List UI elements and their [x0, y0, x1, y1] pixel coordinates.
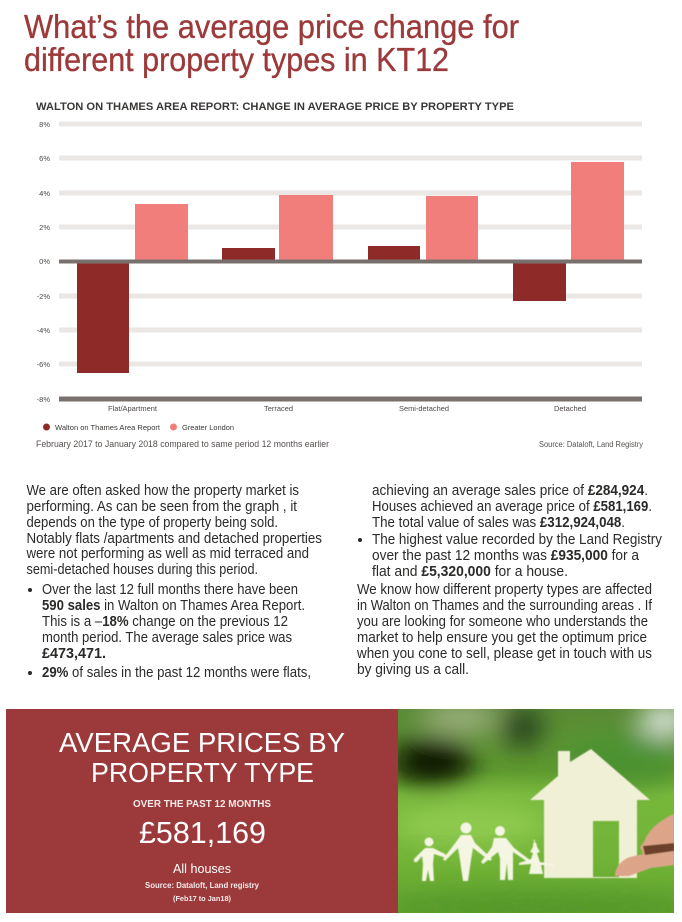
text block: right column: when you cone to sell, please get in touch with us [356, 646, 652, 662]
panel: bar chart [36, 101, 643, 449]
chart title: WALTON ON THAMES AREA REPORT: CHANGE IN AVERAGE PRICE BY PROPERTY TYPE [36, 101, 514, 113]
y axis labels: 0% [39, 257, 50, 266]
text block: left column: This is a –18% change on the previous 12 [42, 614, 288, 630]
text block: right column: The highest value recorded by the Land Registry [372, 532, 663, 548]
text block: right column [356, 483, 663, 678]
text block: left column: performing. As can be seen from the graph , it [26, 499, 297, 515]
y axis labels: -2% [37, 292, 50, 301]
text block: left column: month period. The average sales price was [42, 630, 292, 646]
text block: right column: in Walton on Thames and the surrounding areas . If [357, 598, 653, 614]
text block: left column: Over the last 12 full months there have been [42, 582, 298, 598]
text block: right column: market to help ensure you get the optimum price [357, 630, 647, 646]
text block: right column: We know how different property types are affected [357, 582, 652, 598]
y axis labels: 2% [39, 223, 50, 232]
x axis labels: Detached [554, 404, 586, 413]
period note: February 2017 to January 2018 compared to same period 12 months earlier [36, 439, 329, 449]
panel heading: PROPERTY TYPE [91, 757, 314, 788]
legend [43, 423, 234, 432]
text block: left column: 29% of sales in the past 12 months were flats, [42, 665, 311, 681]
icon: paper house [530, 749, 650, 878]
panel source [145, 881, 260, 903]
text block: left column: We are often asked how the property market is [26, 483, 299, 499]
panel: average prices [6, 709, 398, 913]
bars: Greater London [135, 162, 624, 262]
text block: right column: The total value of sales was £312,924,048. [372, 515, 625, 531]
legend: Greater London [182, 423, 234, 432]
y axis labels [37, 120, 50, 404]
title [24, 8, 519, 78]
text block: left column: Notably flats /apartments and detached properties [26, 531, 322, 547]
y axis labels: -6% [37, 360, 50, 369]
price figure: £581,169 [139, 815, 266, 850]
text block: right column: Houses achieved an average price of £581,169. [372, 499, 652, 515]
icon: paper family [414, 822, 554, 881]
y axis labels: -4% [37, 326, 50, 335]
x axis labels [108, 404, 586, 413]
text block: right column: achieving an average sales price of £284,924. [372, 483, 648, 499]
panel heading [59, 727, 345, 788]
y axis labels: 4% [39, 189, 50, 198]
bars: Walton on Thames [77, 246, 566, 373]
text block: left column [26, 483, 322, 681]
price label: All houses [173, 862, 231, 876]
text block: right column: by giving us a call. [357, 662, 469, 678]
x axis labels: Terraced [264, 404, 293, 413]
x axis labels: Semi-detached [399, 404, 449, 413]
text block: right column: over the past 12 months was £935,000 for a [372, 548, 640, 564]
y axis labels: 8% [39, 120, 50, 129]
text block: left column: semi-detached houses during this period. [26, 562, 258, 578]
title: What’s the average price change for [24, 8, 519, 45]
source note: Source: Dataloft, Land Registry [539, 440, 643, 449]
subheading: OVER THE PAST 12 MONTHS [133, 799, 271, 810]
x axis labels: Flat/Apartment [108, 404, 158, 413]
text block: left column: depends on the type of property being sold. [26, 515, 278, 531]
panel heading: AVERAGE PRICES BY [59, 727, 345, 758]
text block: left column: were not performing as well as mid terraced and [26, 546, 309, 562]
legend: Walton on Thames Area Report [55, 423, 161, 432]
text block: right column: flat and £5,320,000 for a house. [372, 564, 568, 580]
panel source: Source: Dataloft, Land registry [145, 881, 260, 890]
icon: hand [615, 814, 674, 876]
photo: paper house and family on grass [398, 709, 674, 913]
text block: left column: £473,471. [42, 646, 106, 662]
title: different property types in KT12 [24, 41, 449, 78]
text block: right column: you are looking for someone who understands the [357, 614, 648, 630]
panel source: (Feb17 to Jan18) [173, 894, 231, 903]
y axis labels: 6% [39, 154, 50, 163]
text block: left column: 590 sales in Walton on Thames Area Report. [42, 598, 305, 614]
y axis labels: -8% [37, 395, 50, 404]
